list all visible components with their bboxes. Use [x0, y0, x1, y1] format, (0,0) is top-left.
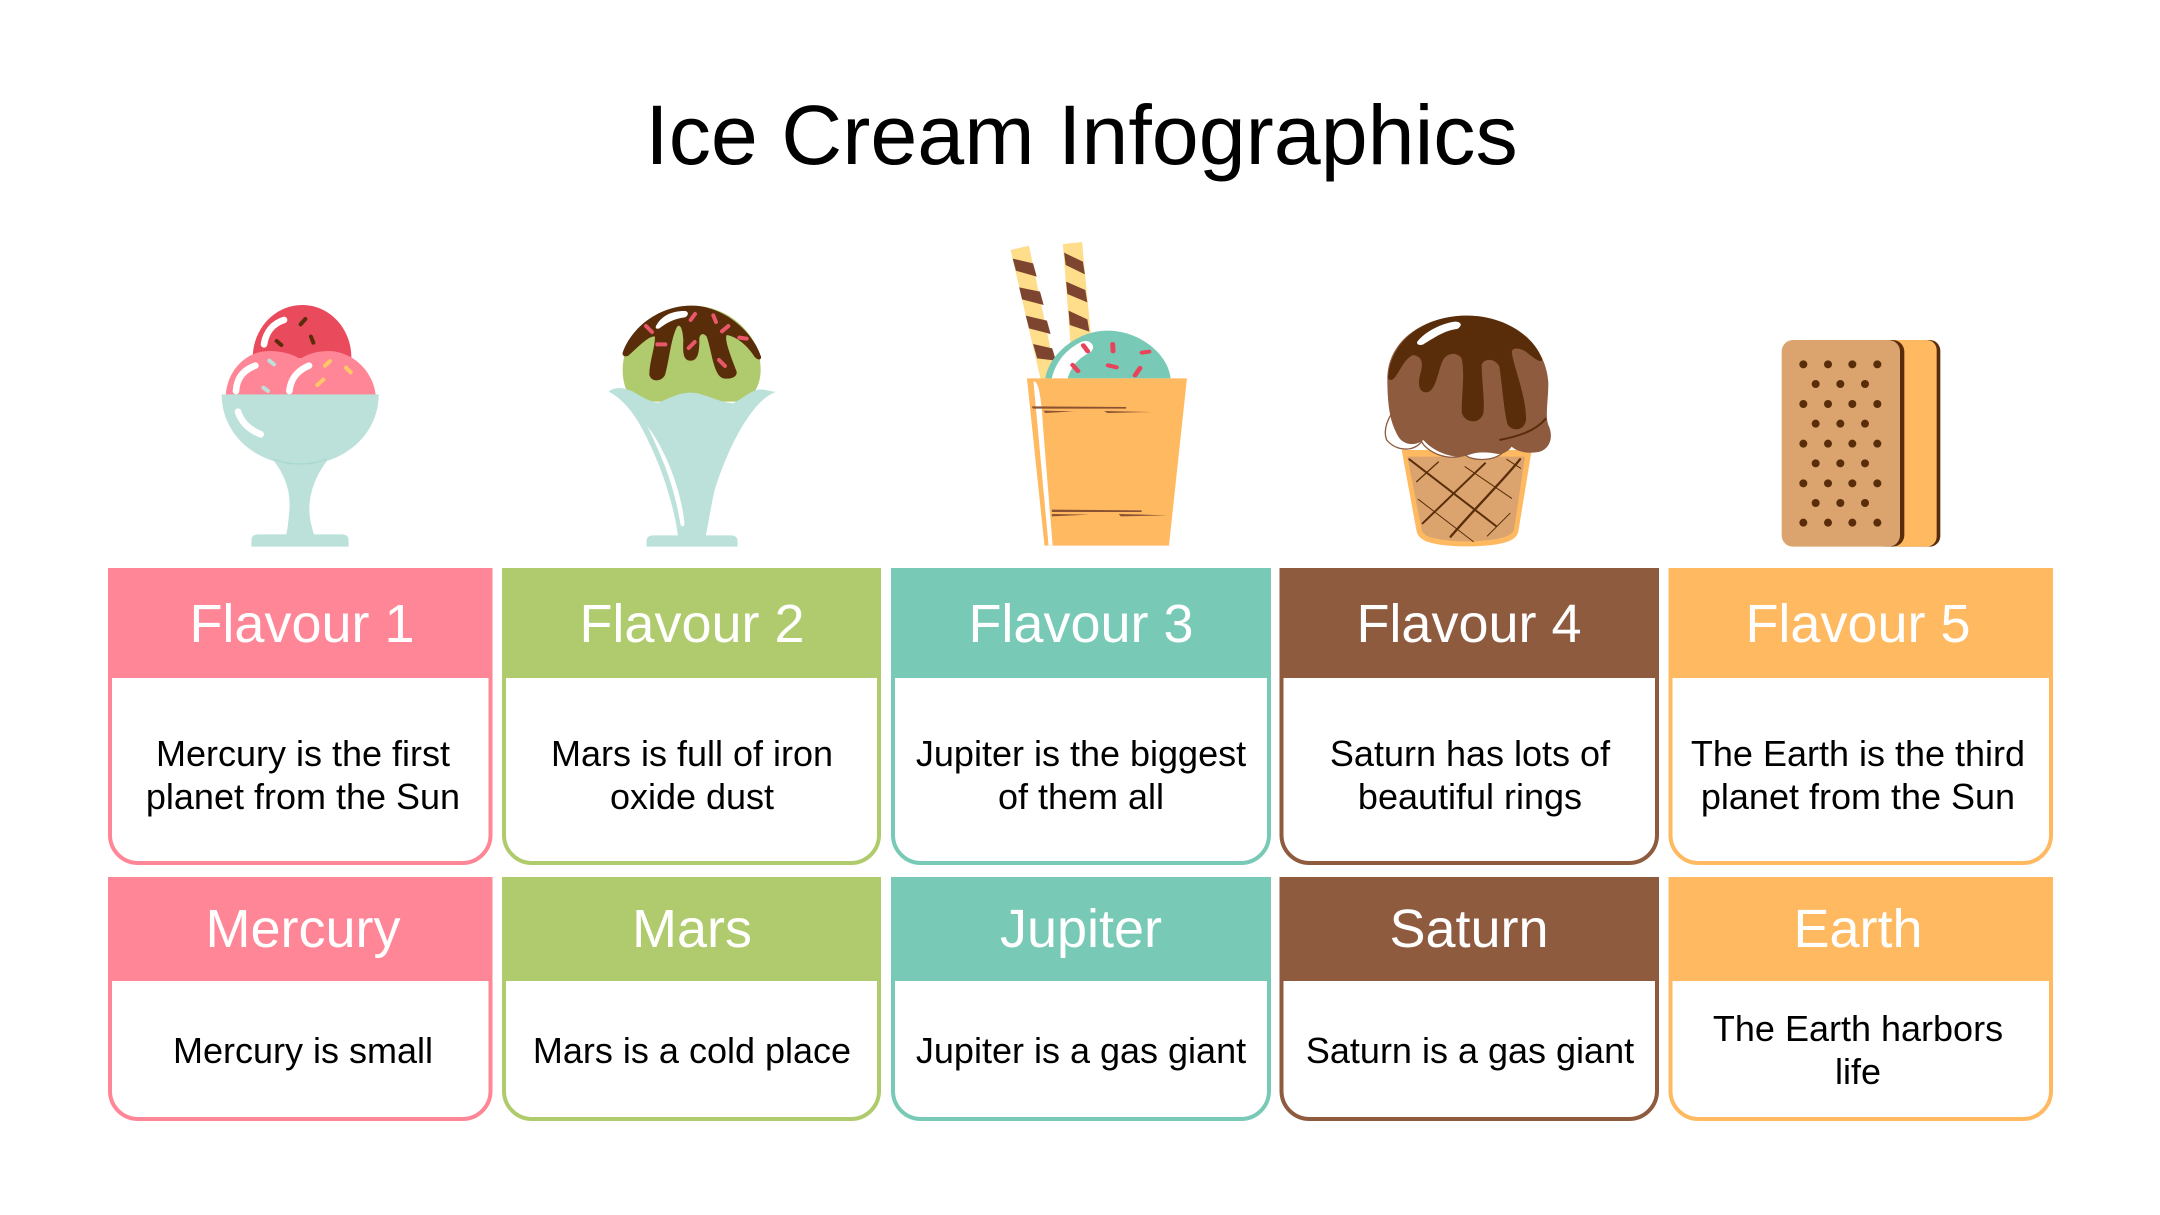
title: Ice Cream Infographics — [645, 88, 1518, 182]
panel: Jupiter: Jupiter — [1000, 899, 1162, 959]
panel: Mars — [502, 877, 881, 1119]
panel: flavour 1: Mercury is the first — [156, 733, 450, 774]
panel: Earth: life — [1835, 1051, 1881, 1092]
panel: flavour 5: planet from the Sun — [1701, 776, 2015, 817]
panel: Saturn: Saturn is a gas giant — [1306, 1030, 1634, 1071]
panel: flavour 3: Jupiter is the biggest — [916, 733, 1246, 774]
icon: green scoop with chocolate in a sundae glass — [609, 306, 776, 547]
panel: Earth: The Earth harbors — [1713, 1008, 2003, 1049]
panel: Jupiter — [891, 877, 1271, 1119]
panel: Earth — [1668, 877, 2053, 1119]
panel: flavour 2 — [502, 568, 881, 863]
panel: flavour 1: Flavour 1 — [189, 594, 415, 654]
panel: Earth: Earth — [1793, 899, 1923, 959]
panel: flavour 5: The Earth is the third — [1691, 733, 2025, 774]
panel: Saturn — [1280, 877, 1659, 1119]
panel: flavour 5: Flavour 5 — [1745, 594, 1971, 654]
panel: flavour 3: of them all — [998, 776, 1164, 817]
panel: Mercury: Mercury — [205, 899, 401, 959]
icon: chocolate ice cream in a waffle cone — [1385, 316, 1551, 546]
panel: Jupiter: Jupiter is a gas giant — [916, 1030, 1246, 1071]
icon: ice cream sandwich biscuit — [1782, 340, 1940, 547]
panel: flavour 4: Saturn has lots of — [1330, 733, 1611, 774]
panel: flavour 2: oxide dust — [610, 776, 774, 817]
panel: flavour 4: Flavour 4 — [1356, 594, 1582, 654]
panel: flavour 3 — [891, 568, 1271, 863]
panel: flavour 2: Mars is full of iron — [551, 733, 833, 774]
panel: flavour 4 — [1280, 568, 1659, 863]
icon: three scoops in a glass bowl — [222, 305, 379, 547]
panel: Mercury: Mercury is small — [173, 1030, 433, 1071]
panel: Mars: Mars is a cold place — [533, 1030, 851, 1071]
panel: flavour 1: planet from the Sun — [146, 776, 460, 817]
panel: flavour 3: Flavour 3 — [968, 594, 1194, 654]
panel: flavour 4: beautiful rings — [1358, 776, 1582, 817]
panel: flavour 5 — [1668, 568, 2053, 863]
panel: Mercury — [108, 877, 492, 1119]
panel: Mars: Mars — [632, 899, 752, 959]
panel: Saturn: Saturn — [1389, 899, 1549, 959]
panel: flavour 2: Flavour 2 — [579, 594, 805, 654]
icon: scoop and wafer rolls in an orange cup — [1011, 242, 1187, 546]
panel: flavour 1 — [108, 568, 492, 863]
